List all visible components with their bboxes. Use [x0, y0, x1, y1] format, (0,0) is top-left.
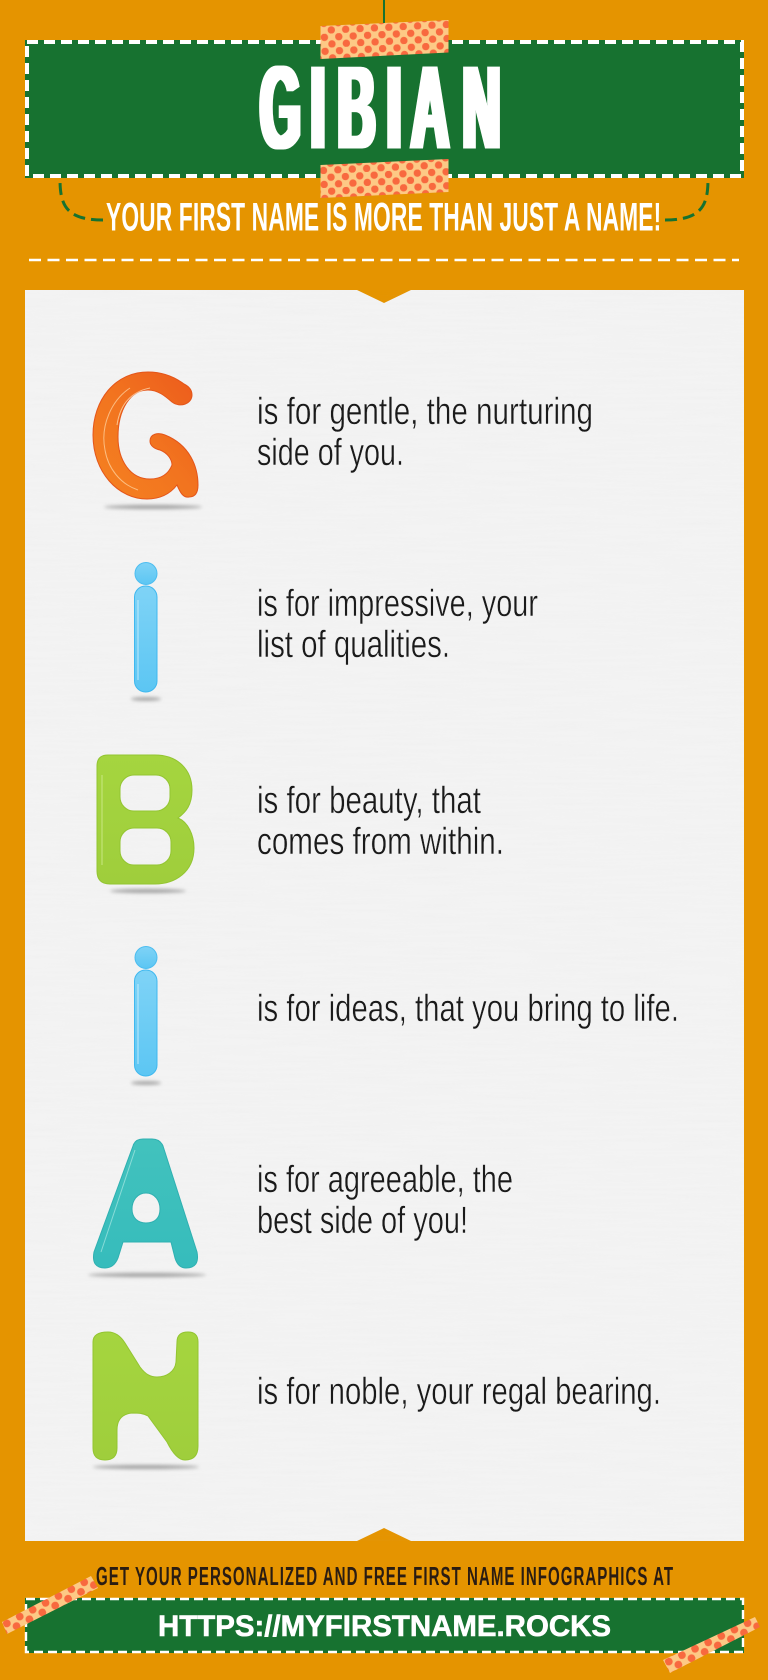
row: G	[93, 372, 593, 509]
title banner	[25, 20, 744, 198]
url banner	[25, 1598, 744, 1653]
icon: letter G	[93, 372, 202, 509]
row: B	[97, 755, 504, 893]
tape: top	[320, 20, 448, 59]
text: G: side of you.	[257, 432, 404, 474]
tape: bottom	[320, 159, 448, 198]
curved connector right	[665, 179, 708, 220]
text: I: is for impressive, your	[257, 583, 538, 625]
tape: bottom left	[2, 1576, 98, 1634]
call to action text: GET YOUR PERSONALIZED AND FREE FIRST NAME INFOGRAPHICS AT	[96, 1562, 673, 1591]
text: N: is for noble, your regal bearing.	[257, 1371, 661, 1413]
curved connector left	[60, 179, 103, 220]
icon: letter A	[88, 1139, 206, 1277]
icon: letter i	[131, 562, 161, 701]
text: B: is for beauty, that	[257, 780, 481, 822]
text: A: is for agreeable, the	[257, 1159, 513, 1201]
row: N	[93, 1332, 661, 1469]
text: A: best side of you!	[257, 1200, 468, 1242]
tape: bottom right	[663, 1617, 760, 1673]
text: I: list of qualities.	[257, 624, 450, 666]
text: B	[257, 780, 504, 863]
text: G	[257, 391, 593, 474]
row: A	[88, 1139, 513, 1277]
text: B: comes from within.	[257, 821, 504, 863]
row: I second	[131, 946, 679, 1085]
icon: letter B	[97, 755, 194, 893]
subtitle: YOUR FIRST NAME IS MORE THAN JUST A NAME!	[106, 195, 661, 239]
panel: letters	[25, 290, 744, 1541]
text: I	[257, 583, 538, 666]
icon: letter N	[93, 1332, 199, 1469]
url text: HTTPS://MYFIRSTNAME.ROCKS	[158, 1610, 611, 1643]
text: G: is for gentle, the nurturing	[257, 391, 593, 433]
text: A	[257, 1159, 513, 1242]
icon: letter i	[131, 946, 161, 1085]
title: GIBIAN	[260, 42, 500, 174]
row: I	[131, 562, 538, 701]
hanging string	[383, 0, 385, 24]
dashed divider	[29, 259, 739, 261]
